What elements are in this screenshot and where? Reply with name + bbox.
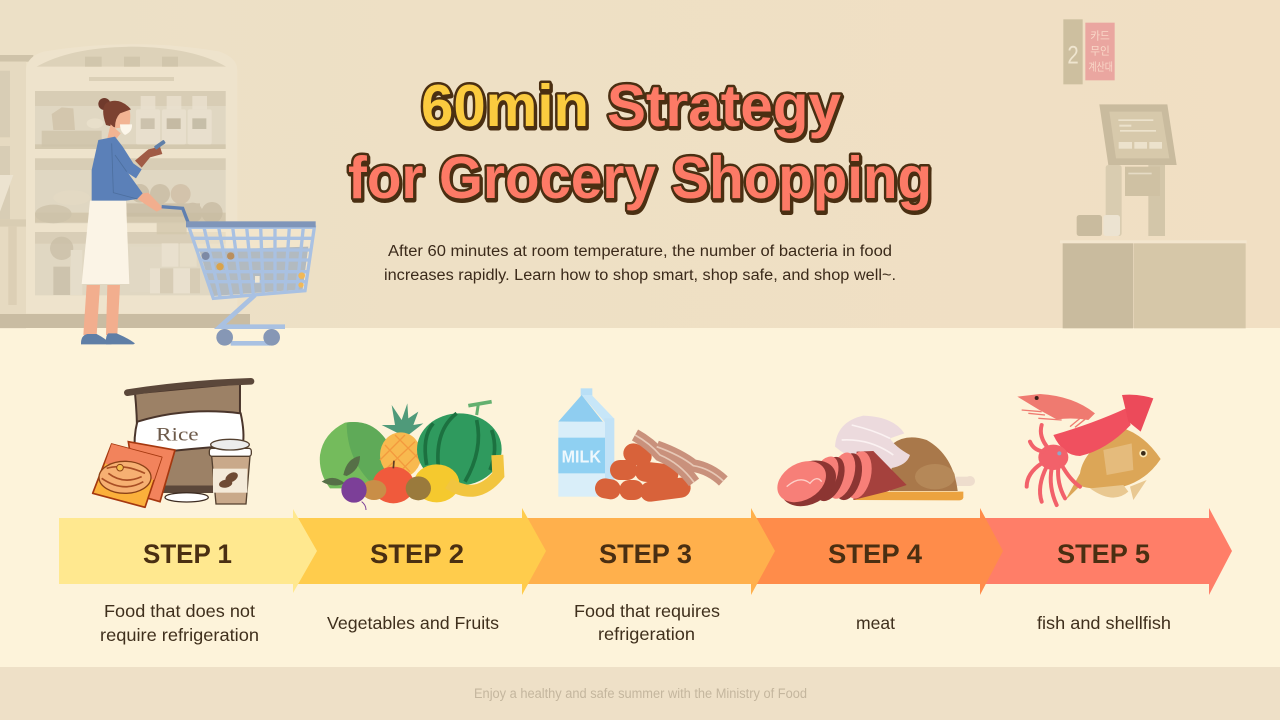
arrow: step 4 [750, 508, 1003, 595]
squid [1027, 395, 1153, 505]
skirt [82, 201, 129, 284]
lower background [0, 328, 1280, 667]
description: step 5: fish and shellfish [1037, 613, 1171, 633]
illustration: checkout kiosk [1060, 19, 1247, 328]
rice bag [127, 381, 251, 502]
cart contents [199, 247, 308, 296]
icon: sausages and bacon [605, 435, 723, 492]
lane sign: 2 [1067, 42, 1079, 69]
roast turkey [890, 437, 958, 491]
intro paragraph: After 60 minutes at room temperature, the number of bacteria in food [388, 243, 892, 260]
pink sign: 카드 [1090, 30, 1110, 42]
illustration: woman with mask [81, 98, 166, 344]
description: step 4: meat [856, 613, 895, 633]
arrow: step 1 [59, 509, 317, 593]
step descriptions [100, 601, 1171, 645]
title line 2: for Grocery Shopping [348, 145, 932, 211]
icon: vegetables and fruits [320, 402, 502, 510]
store floor base [0, 314, 250, 328]
fish [1065, 427, 1161, 501]
banana [448, 455, 498, 491]
footer text: Enjoy a healthy and safe summer with the Ministry of Food [474, 686, 807, 701]
pineapple [380, 403, 423, 478]
kiosk screen [1099, 104, 1177, 165]
icon: rice, noodles and coffee [93, 381, 251, 507]
arrow: step 5 [980, 508, 1232, 595]
shrimp [1017, 394, 1095, 427]
coffee cup [209, 439, 251, 504]
pink sign [1085, 23, 1115, 80]
kiwis [362, 476, 431, 500]
icon: milk carton: MILK [562, 446, 601, 466]
ham wedge [853, 451, 907, 500]
hair and head [98, 98, 132, 138]
step labels: STEP 2 [370, 539, 464, 569]
step labels: STEP 5 [1057, 539, 1150, 569]
description: step 2: Vegetables and Fruits [327, 613, 499, 633]
description: step 1: require refrigeration [100, 625, 259, 645]
cabbage [320, 422, 388, 488]
step arrow band [59, 508, 1232, 595]
intro paragraph [384, 243, 896, 284]
shelf goods [35, 96, 223, 295]
pink sign: 무인 [1090, 46, 1110, 58]
title [348, 73, 932, 211]
intro paragraph: increases rapidly. Learn how to shop smart, shop safe, and shop well~. [384, 267, 896, 284]
footer band [0, 667, 1280, 720]
title word: Strategy: Strategy [607, 73, 841, 139]
top rail [186, 221, 316, 227]
illustration: grocery shelves [0, 44, 250, 328]
turnip [341, 477, 367, 510]
step labels [143, 539, 1150, 569]
icon: seafood [1017, 394, 1161, 505]
step labels: STEP 1 [143, 539, 232, 569]
shoes [81, 333, 135, 344]
counter [1060, 240, 1247, 328]
rice bag: Rice [156, 425, 199, 446]
legs [83, 285, 120, 335]
tray [853, 492, 963, 500]
fish steak [835, 416, 910, 468]
kiosk stand [1106, 165, 1165, 236]
illustration: shopping cart [162, 207, 316, 346]
icon: milk carton [558, 388, 614, 497]
arrow: step 3 [522, 508, 775, 595]
description: step 3: refrigeration [598, 624, 695, 644]
blue top [92, 137, 163, 212]
back forearm and phone [135, 140, 166, 168]
watermelon [417, 402, 502, 485]
description: step 1 [100, 601, 259, 645]
apple [372, 461, 414, 503]
arrow: step 2 [293, 508, 546, 595]
description: step 3: Food that requires [574, 601, 720, 621]
ham slices [770, 449, 876, 515]
chassis [216, 295, 285, 346]
header background [0, 0, 1280, 328]
basket frame [189, 227, 314, 298]
lane sign [1063, 19, 1083, 84]
description: step 1: Food that does not [104, 601, 255, 621]
icon: meat selection [770, 416, 975, 515]
title word: 60min: 60min [421, 73, 589, 139]
produce accents [202, 252, 305, 288]
counter items [1077, 215, 1120, 236]
step labels: STEP 4 [828, 539, 922, 569]
step labels: STEP 3 [599, 539, 692, 569]
noodle package [93, 442, 175, 507]
pink sign: 계산대 [1088, 62, 1113, 74]
lemon [414, 464, 459, 502]
description: step 3 [574, 601, 720, 644]
turkey bone [955, 476, 975, 486]
